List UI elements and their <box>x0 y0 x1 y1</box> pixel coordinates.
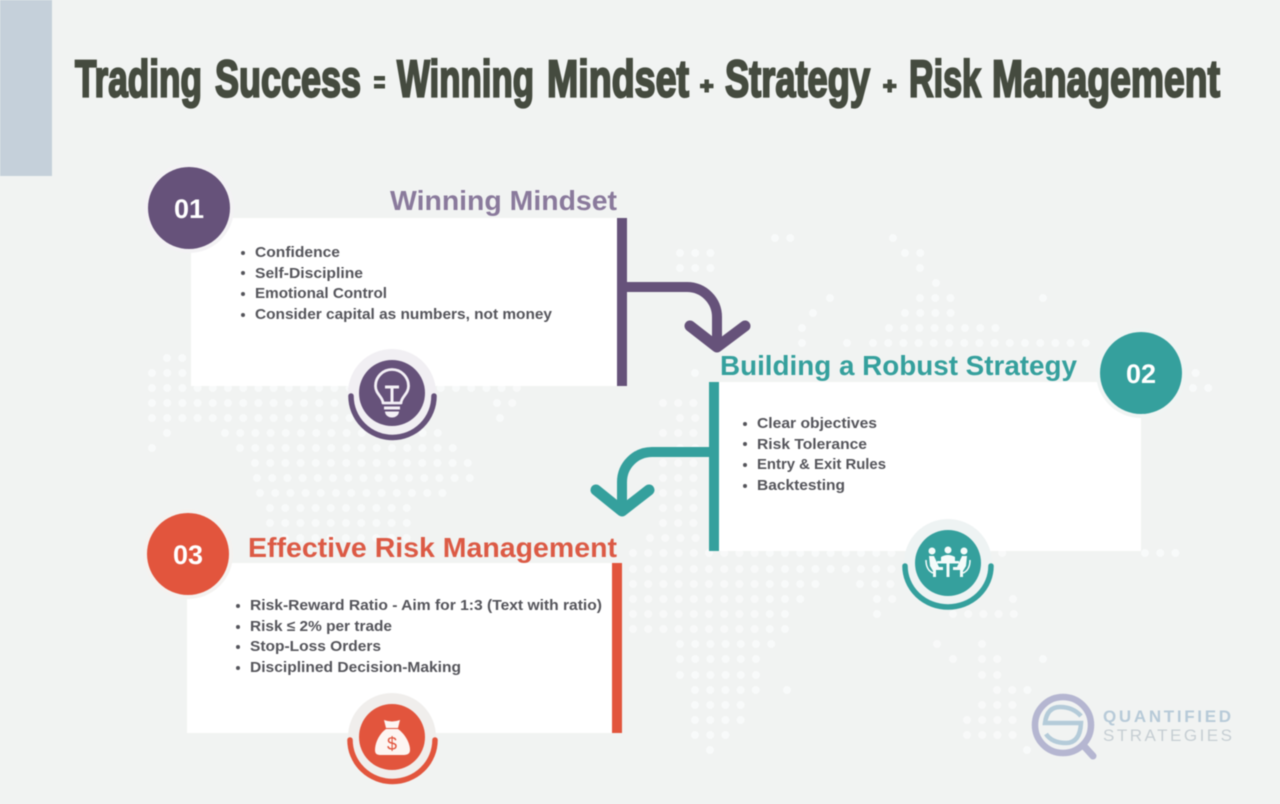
logo: quantified strategies <box>1035 697 1232 756</box>
panel: robust strategy <box>709 328 1186 607</box>
bullet list 1: Consider capital as numbers, not money <box>255 306 553 323</box>
bullet list 2: Entry & Exit Rules <box>757 456 886 473</box>
bullet list 3: Disciplined Decision-Making <box>250 659 461 676</box>
card 1 side bar <box>617 218 627 386</box>
title <box>75 50 1220 108</box>
panel: risk management <box>143 509 622 781</box>
panel: winning mindset <box>144 163 627 438</box>
bullet list 1: Self-Discipline <box>255 265 363 282</box>
title: Success <box>215 50 361 108</box>
heading: winning mindset: Winning Mindset <box>390 185 617 216</box>
bullet list 1: Emotional Control <box>255 285 387 302</box>
card 2 side bar <box>709 382 719 551</box>
bullet list 2 <box>743 415 886 494</box>
bullet list 1: Confidence <box>255 244 340 261</box>
title: Strategy <box>725 50 870 108</box>
badge 01 <box>144 163 234 253</box>
icon: money bag <box>348 693 436 781</box>
card 3 background <box>187 563 612 733</box>
badge 01: 01 <box>174 194 204 224</box>
heading: building a robust strategy: Building a Robust Strategy <box>720 350 1077 381</box>
title: Winning <box>397 50 534 108</box>
bullet list 2: Backtesting <box>757 477 845 494</box>
card 2 background <box>719 382 1141 551</box>
dotted world map background <box>152 238 1210 750</box>
bullet list 3: Risk-Reward Ratio - Aim for 1:3 (Text with ratio) <box>250 597 602 614</box>
arrow: mindset to strategy <box>627 287 745 347</box>
icon: light bulb <box>348 349 436 438</box>
badge 02: 02 <box>1126 359 1156 389</box>
logo tagline: STRATEGIES <box>1103 726 1232 745</box>
badge 02 <box>1096 328 1186 418</box>
arrow: strategy to risk management <box>596 452 709 511</box>
icon: meeting table <box>904 519 992 607</box>
badge 03 <box>143 509 233 599</box>
card 3 side bar <box>612 563 622 733</box>
card 1 background <box>191 218 617 386</box>
title: Trading <box>75 50 202 108</box>
logo mark <box>1035 697 1093 756</box>
bullet list 3 <box>236 597 602 676</box>
badge 03: 03 <box>173 540 203 570</box>
heading: effective risk management: Effective Risk Management <box>248 532 617 563</box>
bullet list 3: Risk ≤ 2% per trade <box>250 618 392 635</box>
bullet list 2: Clear objectives <box>757 415 877 432</box>
title: Mindset <box>547 50 689 108</box>
bullet list 2: Risk Tolerance <box>757 436 867 453</box>
bullet list 1 <box>241 244 553 323</box>
corner accent block <box>0 0 52 176</box>
bullet list 3: Stop-Loss Orders <box>250 638 381 655</box>
icon: money bag: $ <box>387 734 397 754</box>
logo wordmark: QUANTIFIED <box>1103 707 1231 726</box>
title: Risk <box>909 50 981 108</box>
